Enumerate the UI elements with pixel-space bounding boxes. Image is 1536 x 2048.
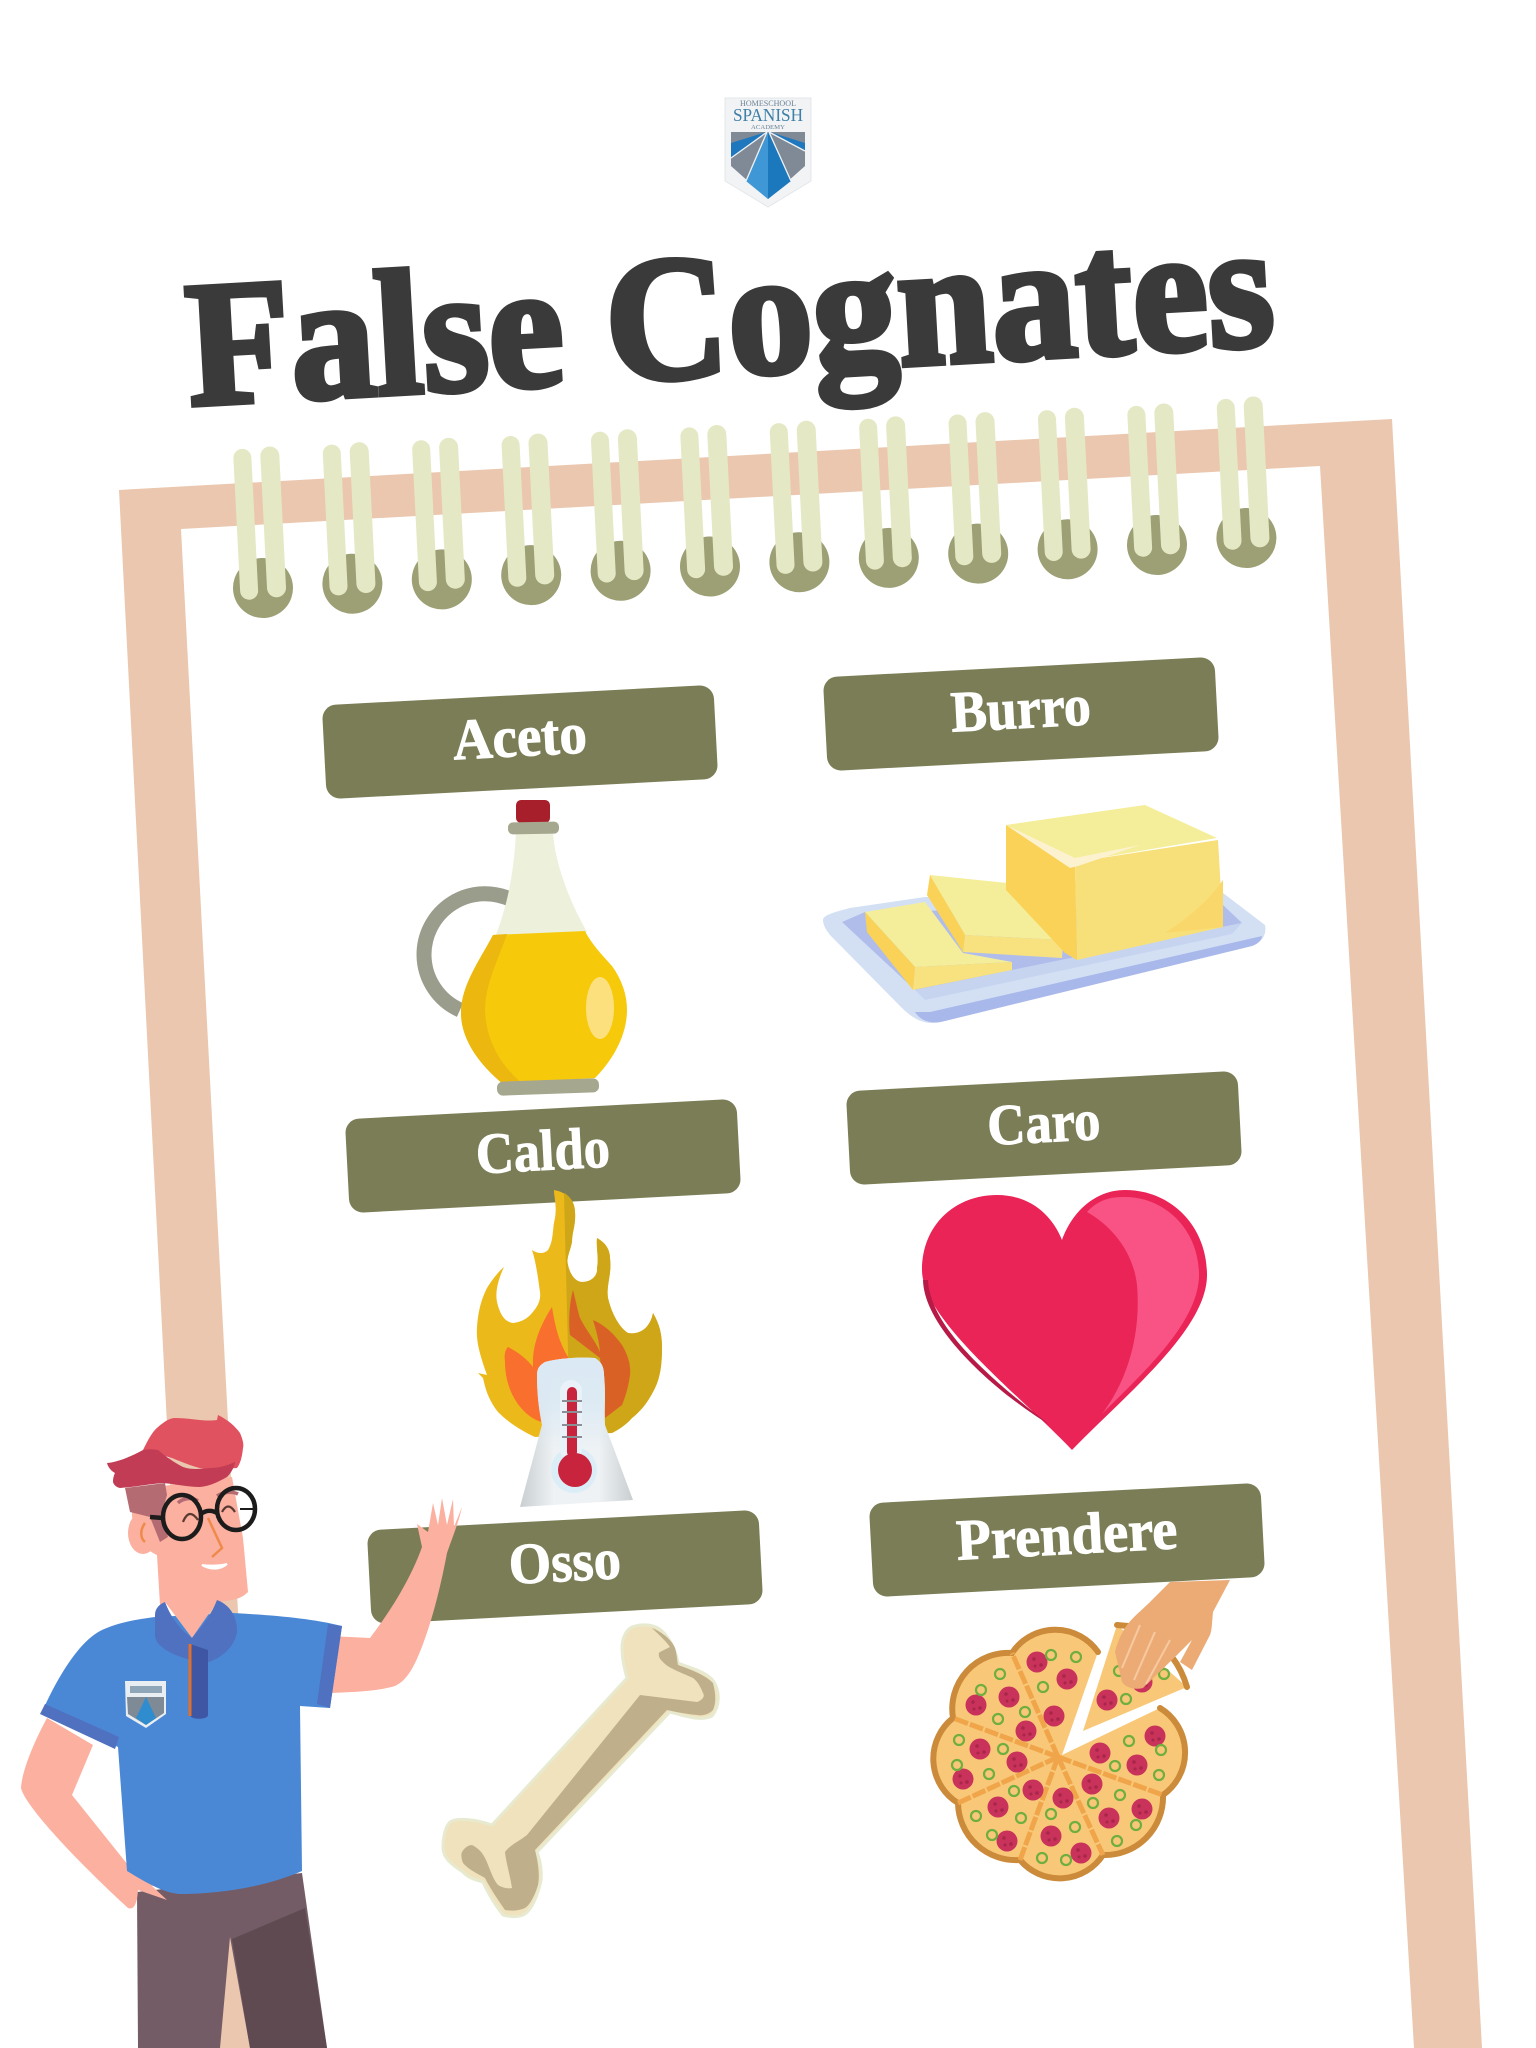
character shirt badge [125, 1681, 166, 1728]
character eyebrows [178, 1492, 238, 1503]
character raised right arm and hand [330, 1498, 462, 1693]
label: Burro [823, 657, 1219, 771]
icon: bone [443, 1625, 718, 1917]
icon: pizza with a hand taking a slice [933, 1580, 1230, 1878]
label: Aceto: Aceto [451, 701, 588, 772]
logo: Homeschool Spanish Academy shield: HOMESCHOOL [740, 99, 796, 108]
title: False Cognates [181, 186, 1278, 444]
label: Osso: Osso [507, 1526, 622, 1597]
label: Burro: Burro [949, 672, 1092, 745]
label: Caldo [345, 1099, 741, 1213]
spiral binding rings [226, 396, 1278, 619]
character neck and face [132, 1477, 248, 1638]
notebook page frame [119, 419, 1482, 2048]
icon: butter on a dish [823, 805, 1265, 1023]
character nose and smile [208, 1518, 222, 1557]
character collar [155, 1600, 237, 1663]
icon: heart [922, 1190, 1207, 1450]
label: Caro: Caro [986, 1087, 1102, 1158]
character glasses [150, 1488, 255, 1539]
label: Prendere: Prendere [955, 1496, 1179, 1573]
icon: flame with thermometer [477, 1190, 662, 1507]
label: Caldo: Caldo [474, 1115, 611, 1186]
character hair [143, 1415, 243, 1470]
logo: Homeschool Spanish Academy shield [725, 98, 811, 207]
character sideburn [125, 1483, 168, 1542]
icon: vinegar bottle [424, 800, 627, 1096]
label: Aceto [322, 685, 718, 799]
label: Osso [367, 1510, 763, 1624]
character legs [137, 1873, 327, 2048]
character left arm on hip [21, 1718, 170, 1908]
label: Caro [846, 1071, 1242, 1185]
character shirt [42, 1613, 342, 1894]
character: waving teacher [21, 1415, 462, 2048]
label: Prendere [869, 1483, 1265, 1597]
logo: Homeschool Spanish Academy shield: SPANISH [733, 105, 803, 125]
logo: Homeschool Spanish Academy shield: ACADEMY [751, 124, 785, 131]
